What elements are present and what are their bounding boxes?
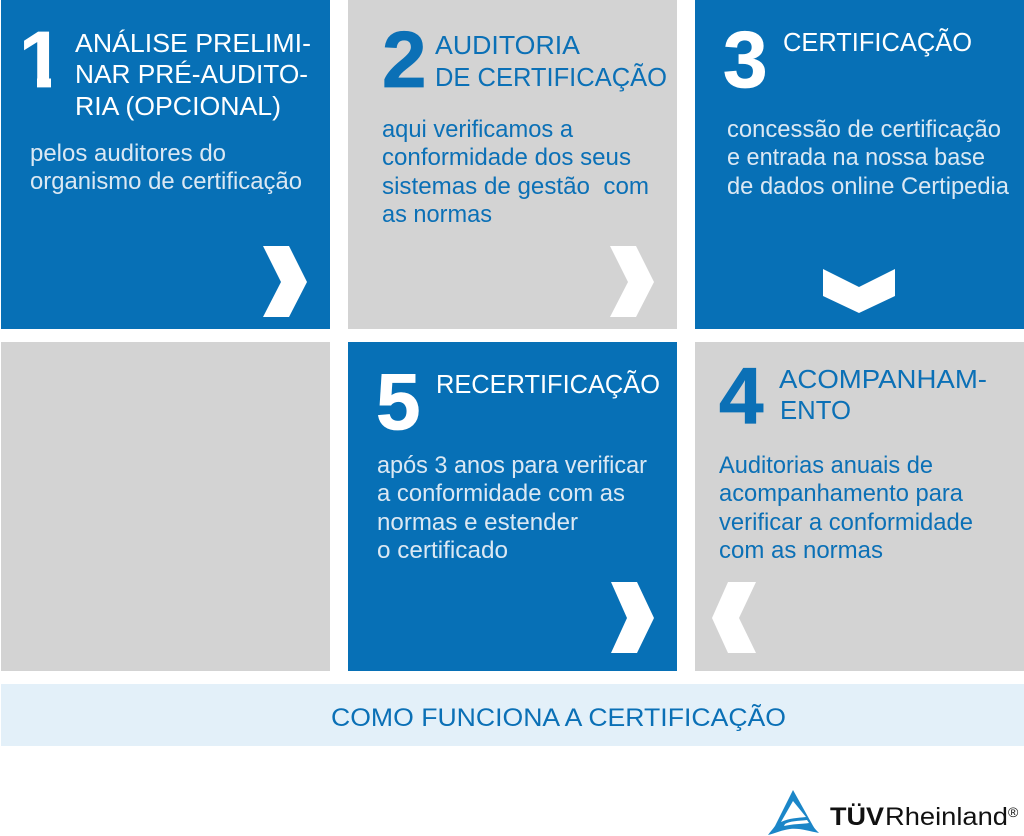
body text 4: Auditorias anuais de: [719, 452, 933, 479]
step number 5: 5: [376, 357, 420, 446]
body text 2: as normas: [382, 201, 492, 228]
arrow: right: [263, 246, 307, 317]
body text 5: a conformidade com as: [377, 480, 625, 507]
logo wordmark: Rheinland: [885, 803, 1008, 831]
body text 4: verificar a conformidade: [719, 509, 973, 536]
panel 3: certification: [695, 0, 1024, 329]
arrow: right: [610, 246, 654, 317]
body text 3: de dados online Certipedia: [727, 173, 1010, 200]
body text 3: [727, 116, 1010, 200]
body text 5: o certificado: [377, 537, 508, 564]
panel 1: preliminary analysis: [1, 0, 330, 329]
panel 4: follow-up: [695, 342, 1024, 671]
body text 1: pelos auditores do: [30, 140, 226, 167]
arrow: left: [712, 582, 756, 653]
step number 2: 2: [382, 15, 426, 104]
panel 2: certification audit: [348, 0, 677, 329]
heading 4: ACOMPANHAM-: [779, 364, 987, 394]
logo wordmark: [830, 802, 1008, 831]
body text 4: acompanhamento para: [719, 480, 964, 507]
arrow: down: [823, 269, 895, 313]
logo: TÜV Rheinland: [768, 790, 1019, 835]
step number 3: 3: [723, 15, 768, 104]
body text 2: [382, 116, 649, 228]
heading 2: DE CERTIFICAÇÃO: [435, 62, 667, 92]
caption band: [1, 684, 1024, 746]
heading 1: [75, 28, 311, 121]
heading 1: RIA (OPCIONAL): [75, 91, 281, 121]
icon: logo triangle: [768, 790, 819, 835]
body text 5: [377, 452, 647, 564]
step number 4: 4: [719, 351, 764, 440]
heading 1: NAR PRÉ-AUDITO-: [75, 59, 308, 89]
body text 4: [719, 452, 973, 564]
heading 2: [435, 30, 667, 92]
panel 5: recertification: [348, 342, 677, 671]
heading 4: ENTO: [780, 395, 851, 425]
body text 2: sistemas de gestão com: [382, 173, 649, 200]
heading 3: CERTIFICAÇÃO: [783, 27, 972, 57]
panel: empty grey tile: [1, 342, 330, 671]
body text 5: normas e estender: [377, 509, 578, 536]
heading 2: AUDITORIA: [435, 30, 581, 60]
body text 4: com as normas: [719, 537, 883, 564]
heading 4: [779, 364, 987, 425]
heading 5: RECERTIFICAÇÃO: [436, 369, 660, 399]
body text 3: concessão de certificação: [727, 116, 1001, 143]
arrow: right: [611, 582, 654, 653]
step number 1: 1: [19, 15, 64, 104]
body text 2: conformidade dos seus: [382, 144, 631, 171]
body text 1: organismo de certificação: [30, 168, 302, 195]
registered mark: ®: [1008, 804, 1019, 820]
heading 1: ANÁLISE PRELIMI-: [75, 28, 311, 58]
body text 5: após 3 anos para verificar: [377, 452, 647, 479]
body text 2: aqui verificamos a: [382, 116, 574, 143]
body text 3: e entrada na nossa base: [727, 144, 985, 171]
logo wordmark: TÜV: [830, 802, 884, 831]
caption title: COMO FUNCIONA A CERTIFICAÇÃO: [331, 703, 786, 732]
body text 1: [30, 140, 302, 195]
